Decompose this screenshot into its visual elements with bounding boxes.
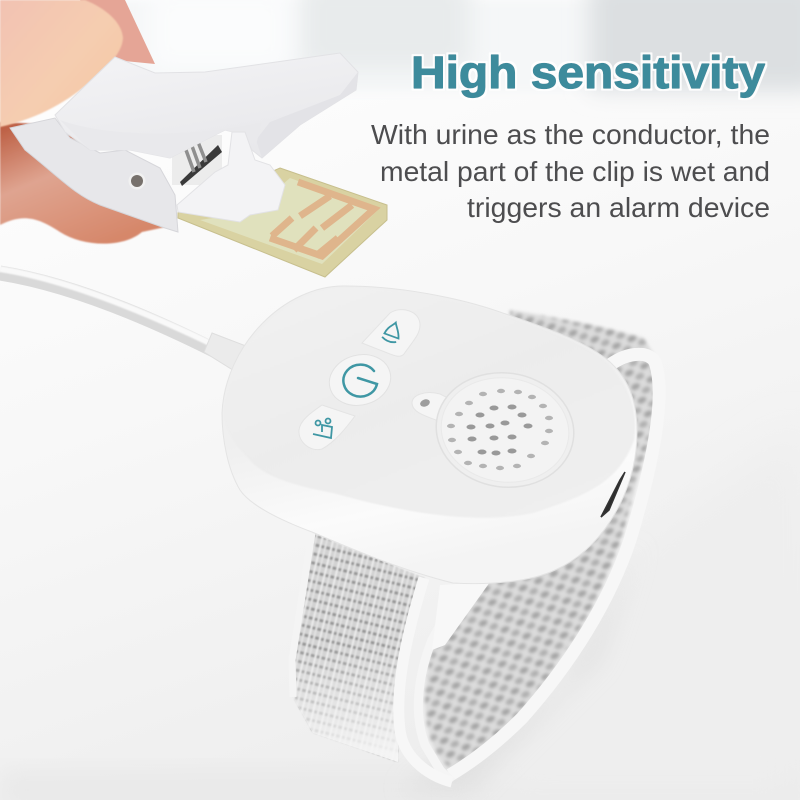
clip upper jaw [55,53,358,158]
icon: mode [313,418,332,438]
indicator light [412,393,460,420]
clip pivot pin [128,172,146,190]
button: power [324,348,396,412]
finger behind clip [80,0,155,64]
clip spring [172,135,222,186]
clip lower jaw [10,118,178,232]
thumb [0,0,123,127]
device body [222,286,637,584]
cable [0,269,246,372]
clip tongue [177,132,285,222]
description text: triggers an alarm device [467,192,770,223]
icon: power symbol [343,365,377,397]
hand holding the clip [0,0,175,244]
button: alarm [362,310,420,356]
alligator clip [10,53,358,232]
title: High sensitivity [411,47,765,98]
lower finger [0,122,175,244]
button: mode [299,405,355,450]
description text [371,119,770,223]
charging port [601,472,625,517]
strap: front band [292,533,452,782]
description text: With urine as the conductor, the [371,119,770,150]
strap: inner back band [418,310,659,782]
strap light edge [450,354,659,775]
device side bevel [222,286,637,584]
strap shadow on table [400,540,640,790]
icon: bell [381,320,403,344]
description text: metal part of the clip is wet and [380,156,770,187]
speaker grille [429,364,581,496]
device top face [224,288,635,518]
circuit sensor board [178,168,387,277]
